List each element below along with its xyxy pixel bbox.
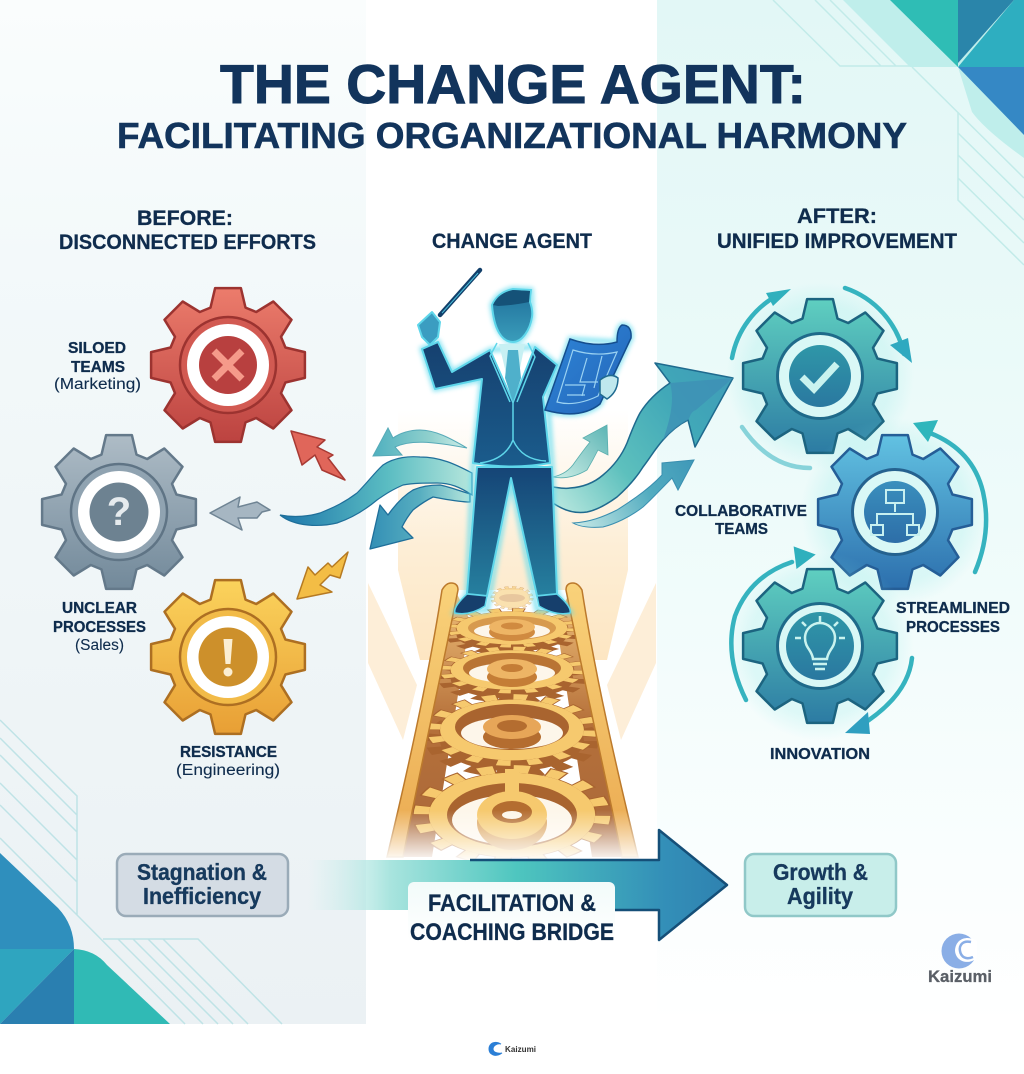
label: unclear processes: PROCESSES [53, 619, 146, 636]
blueprint [545, 325, 631, 414]
gear: streamlined processes (blue) [801, 418, 989, 606]
logo: footer kaizumi: Kaizumi [505, 1045, 536, 1054]
top faded gear [493, 587, 531, 609]
label: collaborative teams [675, 503, 807, 538]
gear: unclear processes (gray): ? [107, 490, 131, 534]
rails [387, 583, 458, 857]
bridge label [408, 882, 615, 946]
status box: stagnation [117, 854, 288, 916]
label: siloed teams [54, 340, 141, 393]
label: siloed teams: TEAMS [71, 359, 125, 376]
status box: growth: Agility [787, 883, 853, 909]
title: FACILITATING ORGANIZATIONAL HARMONY [117, 115, 907, 156]
status box: stagnation: Inefficiency [143, 883, 261, 909]
title [117, 53, 907, 156]
ramp gear 5 [421, 769, 603, 861]
shirt, tie and lapels [480, 343, 546, 463]
label: unclear processes: (Sales) [75, 637, 124, 654]
label: innovation: INNOVATION [770, 746, 870, 763]
gear: siloed teams (red) [151, 288, 305, 442]
heading: before: BEFORE: [137, 207, 233, 230]
label: collaborative teams: TEAMS [715, 521, 768, 538]
status box: stagnation: Stagnation & [137, 859, 267, 885]
arrow: red lightning [291, 431, 345, 480]
logo: kaizumi watermark [928, 934, 992, 986]
right hand [600, 375, 618, 399]
gear ramp bridge [370, 583, 655, 861]
status box: growth: Growth & [773, 859, 868, 885]
ramp gear 3 [445, 648, 579, 701]
gear: collaborative teams (teal) [726, 282, 914, 470]
label: resistance [176, 744, 280, 779]
ramp gear 2 [452, 610, 572, 653]
label: collaborative teams: COLLABORATIVE [675, 503, 807, 520]
swoosh arrows: right [553, 363, 733, 527]
baton [440, 270, 480, 315]
gear: resistance (yellow) [151, 580, 305, 734]
bottom-left corner decoration [0, 720, 282, 1024]
label: resistance: (Engineering) [176, 762, 280, 779]
label: unclear processes [53, 600, 146, 654]
label: streamlined processes: STREAMLINED [896, 600, 1010, 617]
raised hand [418, 312, 440, 345]
head [492, 289, 532, 342]
heading: after: UNIFIED IMPROVEMENT [717, 230, 957, 253]
jacket and raised arm [422, 342, 557, 466]
bridge label: COACHING BRIDGE [410, 919, 614, 946]
bridge label: FACILITATION & [428, 890, 596, 917]
trousers [467, 467, 557, 596]
swoosh arrows: left [280, 428, 472, 549]
arrow: yellow lightning [297, 552, 348, 599]
logo: kaizumi watermark: Kaizumi [928, 967, 992, 986]
ramp gear 4 [434, 697, 590, 774]
gear: unclear processes (gray) [42, 435, 196, 589]
label: siloed teams: SILOED [68, 340, 126, 357]
title: THE CHANGE AGENT: [220, 53, 806, 115]
logo: footer kaizumi [489, 1042, 536, 1055]
shoes [455, 594, 570, 614]
orange light rays [368, 410, 656, 740]
heading: before [59, 207, 316, 254]
heading: before: DISCONNECTED EFFORTS [59, 231, 316, 254]
label: resistance: RESISTANCE [180, 744, 277, 761]
label: siloed teams: (Marketing) [54, 376, 141, 393]
gear: innovation (teal) [726, 546, 914, 740]
arrow: gray lightning [210, 497, 270, 530]
figure glow [422, 289, 631, 612]
label: streamlined processes: PROCESSES [906, 619, 1000, 636]
label: unclear processes: UNCLEAR [62, 600, 137, 617]
heading: after: AFTER: [797, 205, 877, 228]
status box: growth [745, 854, 896, 916]
change agent figure [418, 270, 631, 614]
top-right corner decoration [773, 0, 1024, 265]
label: streamlined processes [896, 600, 1010, 636]
bridge arrow [307, 830, 727, 946]
heading: after [717, 205, 957, 253]
heading: change agent: CHANGE AGENT [432, 230, 592, 253]
